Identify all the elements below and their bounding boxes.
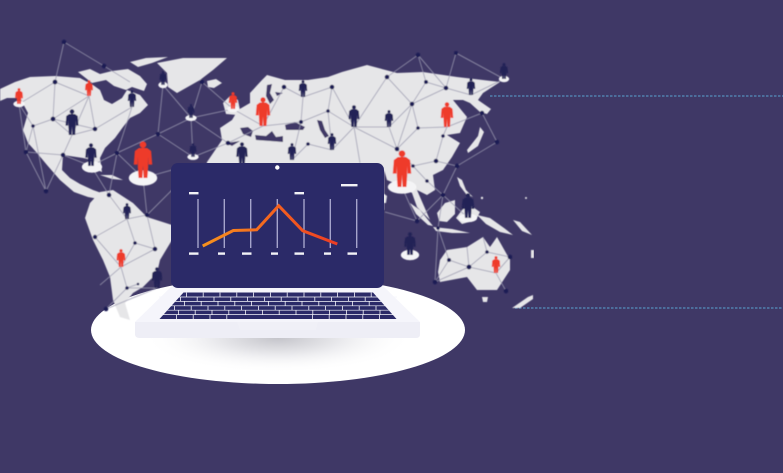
- laptop screen: [171, 163, 384, 288]
- chart: trend line: [203, 206, 337, 246]
- laptop shadow: [143, 310, 413, 380]
- map: continents: [0, 57, 534, 320]
- laptop: [135, 163, 420, 338]
- line chart: [189, 184, 358, 255]
- map: inland seas: [226, 84, 329, 146]
- camera: [275, 165, 279, 170]
- laptop base: [135, 286, 420, 338]
- chart: tick labels: [189, 184, 358, 255]
- map: location platforms: [14, 76, 509, 260]
- map: network nodes: [24, 40, 512, 311]
- map: navy people markers: [66, 63, 508, 288]
- map: red people markers: [15, 80, 500, 273]
- laptop trackpad notch: [237, 322, 318, 330]
- chart: vertical bars: [198, 199, 357, 248]
- world network map: [0, 40, 534, 320]
- white elliptical platform: [91, 276, 465, 384]
- keyboard: [159, 292, 397, 319]
- map: network links: [19, 42, 510, 309]
- infographic canvas: [0, 39, 783, 384]
- dashed connector lines: [490, 96, 783, 308]
- laptop front edge: [135, 322, 420, 338]
